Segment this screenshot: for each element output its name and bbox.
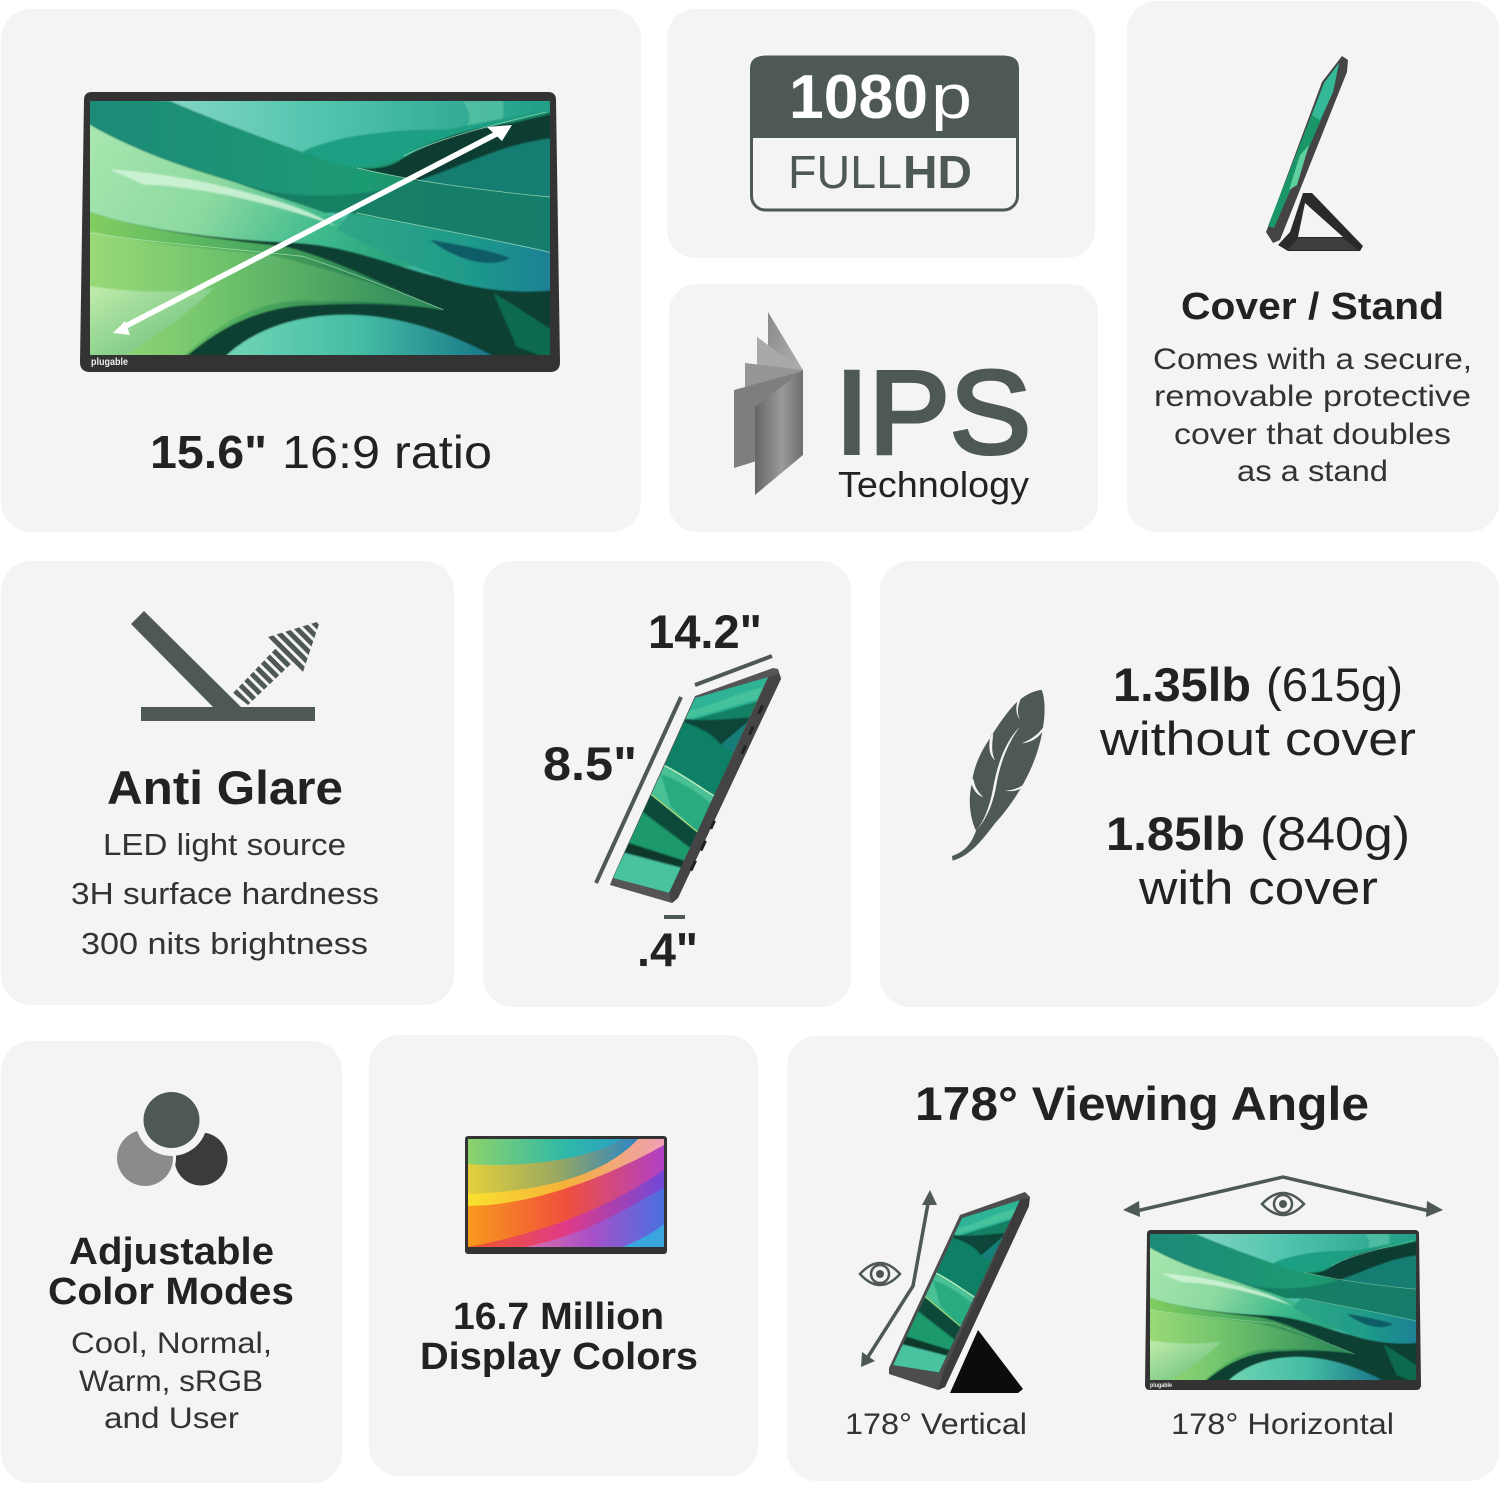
- mode list: Cool, Normal,: [71, 1327, 272, 1360]
- IPS wordmark: IPS: [835, 347, 1031, 479]
- badge: 1080p Full HD: 1080: [789, 63, 928, 132]
- icon: three overlapping circles: [114, 1084, 228, 1189]
- badge: 1080p Full HD: HD: [903, 146, 972, 198]
- feature list: [71, 827, 379, 961]
- weight with cover: with cover: [1138, 861, 1378, 914]
- weight without cover: [1099, 658, 1416, 765]
- heading: adjustable color modes: Adjustable: [69, 1231, 274, 1273]
- weight without cover: 1.35lb: [1113, 658, 1251, 711]
- weight with cover: (840g): [1260, 807, 1410, 860]
- size caption: 15.6": [150, 426, 267, 478]
- horizontal caption: 178° Horizontal: [1171, 1408, 1394, 1441]
- heading: 16.7 million display colors: [420, 1296, 698, 1378]
- panel: 15.6 inch screen size: [1, 9, 641, 532]
- monitor at angle: [610, 668, 781, 903]
- mode list: [71, 1327, 272, 1435]
- monitor with diagonal arrow: [80, 92, 560, 372]
- mode list: and User: [104, 1402, 239, 1435]
- dimension lines: [596, 656, 772, 917]
- panel: dimensions: [483, 561, 851, 1007]
- diagonal size arrow: [113, 125, 512, 335]
- weight with cover: [1106, 807, 1410, 914]
- monitor, horizontal view: plugable: [1150, 1383, 1173, 1389]
- monitor with rainbow screen: [465, 1136, 667, 1254]
- icon: eye, horizontal: [1262, 1193, 1304, 1215]
- panel: color modes: [1, 1041, 342, 1483]
- vertical caption: 178° Vertical: [845, 1408, 1027, 1441]
- description: as a stand: [1237, 455, 1388, 488]
- badge: 1080p Full HD: p: [931, 63, 972, 132]
- panel: anti glare: [1, 561, 454, 1005]
- mode list: Warm, sRGB: [79, 1365, 263, 1398]
- description: [1153, 343, 1472, 488]
- brand logo: plugable: [91, 357, 128, 368]
- panel: weight: [880, 561, 1499, 1007]
- weight without cover: (615g): [1266, 658, 1403, 711]
- heading: Anti Glare: Anti Glare: [107, 761, 343, 814]
- panel: display colors: [369, 1035, 758, 1476]
- panel: IPS technology: [669, 284, 1098, 532]
- badge: 1080p Full HD: [750, 56, 1019, 210]
- weight with cover: 1.85lb: [1106, 807, 1245, 860]
- description: Comes with a secure,: [1153, 343, 1472, 376]
- heading: 16.7 million display colors: 16.7 Million: [453, 1296, 664, 1338]
- panel: 1080p badge: [667, 9, 1095, 258]
- weight without cover: without cover: [1099, 712, 1416, 765]
- description: cover that doubles: [1174, 418, 1451, 451]
- panel: cover and stand: [1127, 1, 1499, 532]
- panel: viewing angle: [787, 1036, 1499, 1481]
- monitor, horizontal view: [1145, 1230, 1421, 1390]
- heading: 16.7 million display colors: Display Colors: [420, 1336, 698, 1378]
- vertical angle arrow: [861, 1190, 937, 1367]
- description: removable protective: [1154, 380, 1471, 413]
- ratio caption: 16:9 ratio: [282, 426, 492, 478]
- height label: 8.5": [543, 737, 637, 790]
- horizontal angle arrows: [1123, 1177, 1443, 1217]
- heading: Cover / Stand: Cover / Stand: [1181, 286, 1444, 328]
- feature list: 300 nits brightness: [81, 926, 368, 961]
- monitor on stand, vertical view: [889, 1192, 1030, 1393]
- feature list: 3H surface hardness: [71, 876, 379, 911]
- heading: adjustable color modes: [48, 1231, 294, 1313]
- heading: adjustable color modes: Color Modes: [48, 1271, 294, 1313]
- badge: 1080p Full HD: FULL: [788, 146, 902, 198]
- icon: IPS folded sheets: [734, 312, 803, 495]
- side ports: [690, 705, 764, 871]
- heading: 178 viewing angle: 178° Viewing Angle: [915, 1077, 1369, 1130]
- icon: monitor on stand, side view: [1266, 56, 1363, 251]
- Technology label: Technology: [838, 464, 1029, 505]
- icon: eye, vertical: [860, 1263, 900, 1285]
- icon: reflected light: [131, 611, 320, 721]
- feature list: LED light source: [103, 827, 346, 862]
- width label: 14.2": [648, 605, 762, 658]
- icon: feather: [952, 690, 1045, 861]
- depth label: .4": [637, 923, 698, 976]
